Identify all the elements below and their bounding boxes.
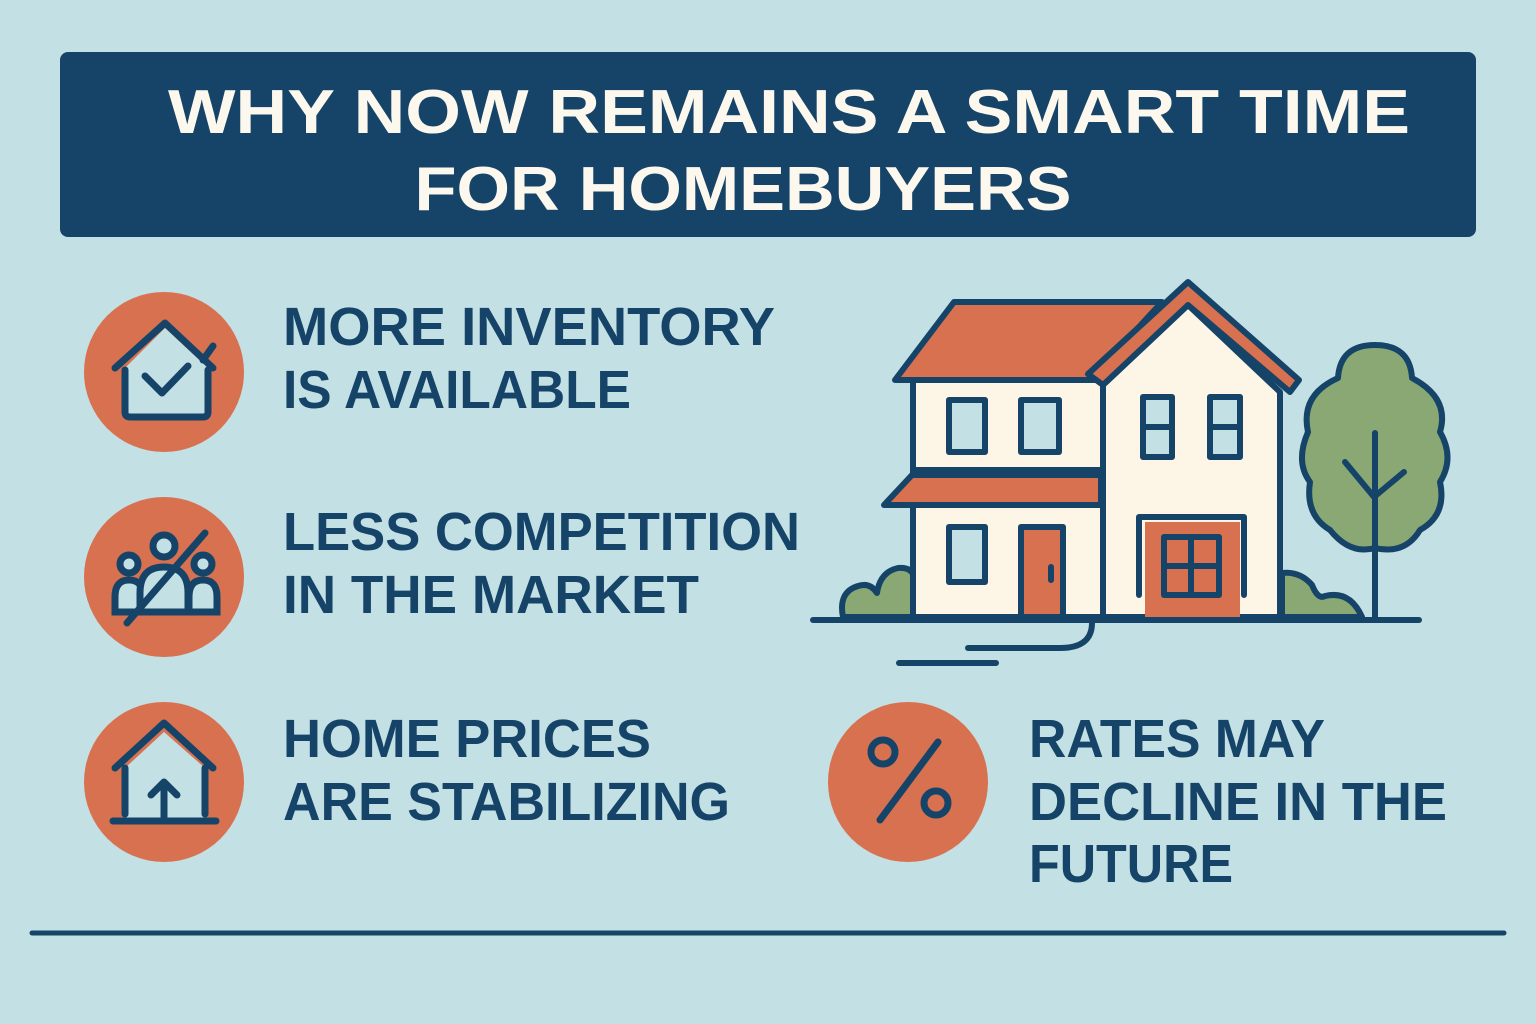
icon: people with slash xyxy=(84,497,244,657)
text: less competition: LESS COMPETITION xyxy=(283,502,800,562)
left roof xyxy=(895,302,1162,380)
text: home prices: HOME PRICES xyxy=(283,709,651,769)
icon: house with check xyxy=(84,292,244,452)
text: less competition: IN THE MARKET xyxy=(283,565,699,625)
text: more inventory: IS AVAILABLE xyxy=(283,360,631,420)
text: rates may decline: RATES MAY xyxy=(1029,709,1325,769)
right body xyxy=(1103,305,1280,617)
band and awning xyxy=(913,467,1103,473)
title banner: WHY NOW REMAINS A SMART TIME xyxy=(168,78,1410,147)
garage xyxy=(1139,517,1244,595)
tree xyxy=(1302,345,1448,617)
text: home prices xyxy=(283,709,730,832)
text: more inventory xyxy=(283,297,775,420)
illustration: house with tree xyxy=(813,282,1448,663)
bottom rule xyxy=(32,930,1504,936)
bushes xyxy=(842,568,1362,617)
icon: percent xyxy=(828,702,988,862)
icon: house with up arrow xyxy=(84,702,244,862)
text: rates may decline: FUTURE xyxy=(1029,834,1233,894)
text: more inventory: MORE INVENTORY xyxy=(283,297,775,357)
title banner: FOR HOMEBUYERS xyxy=(414,155,1072,224)
door xyxy=(1021,527,1063,617)
text: rates may decline: DECLINE IN THE xyxy=(1029,772,1447,832)
text: home prices: ARE STABILIZING xyxy=(283,772,730,832)
title banner xyxy=(60,52,1476,237)
left body xyxy=(913,380,1103,617)
windows xyxy=(949,397,1240,582)
ground and path xyxy=(813,620,1419,663)
gable roof xyxy=(1088,282,1299,392)
text: rates may decline xyxy=(1029,709,1447,894)
text: less competition xyxy=(283,502,800,625)
